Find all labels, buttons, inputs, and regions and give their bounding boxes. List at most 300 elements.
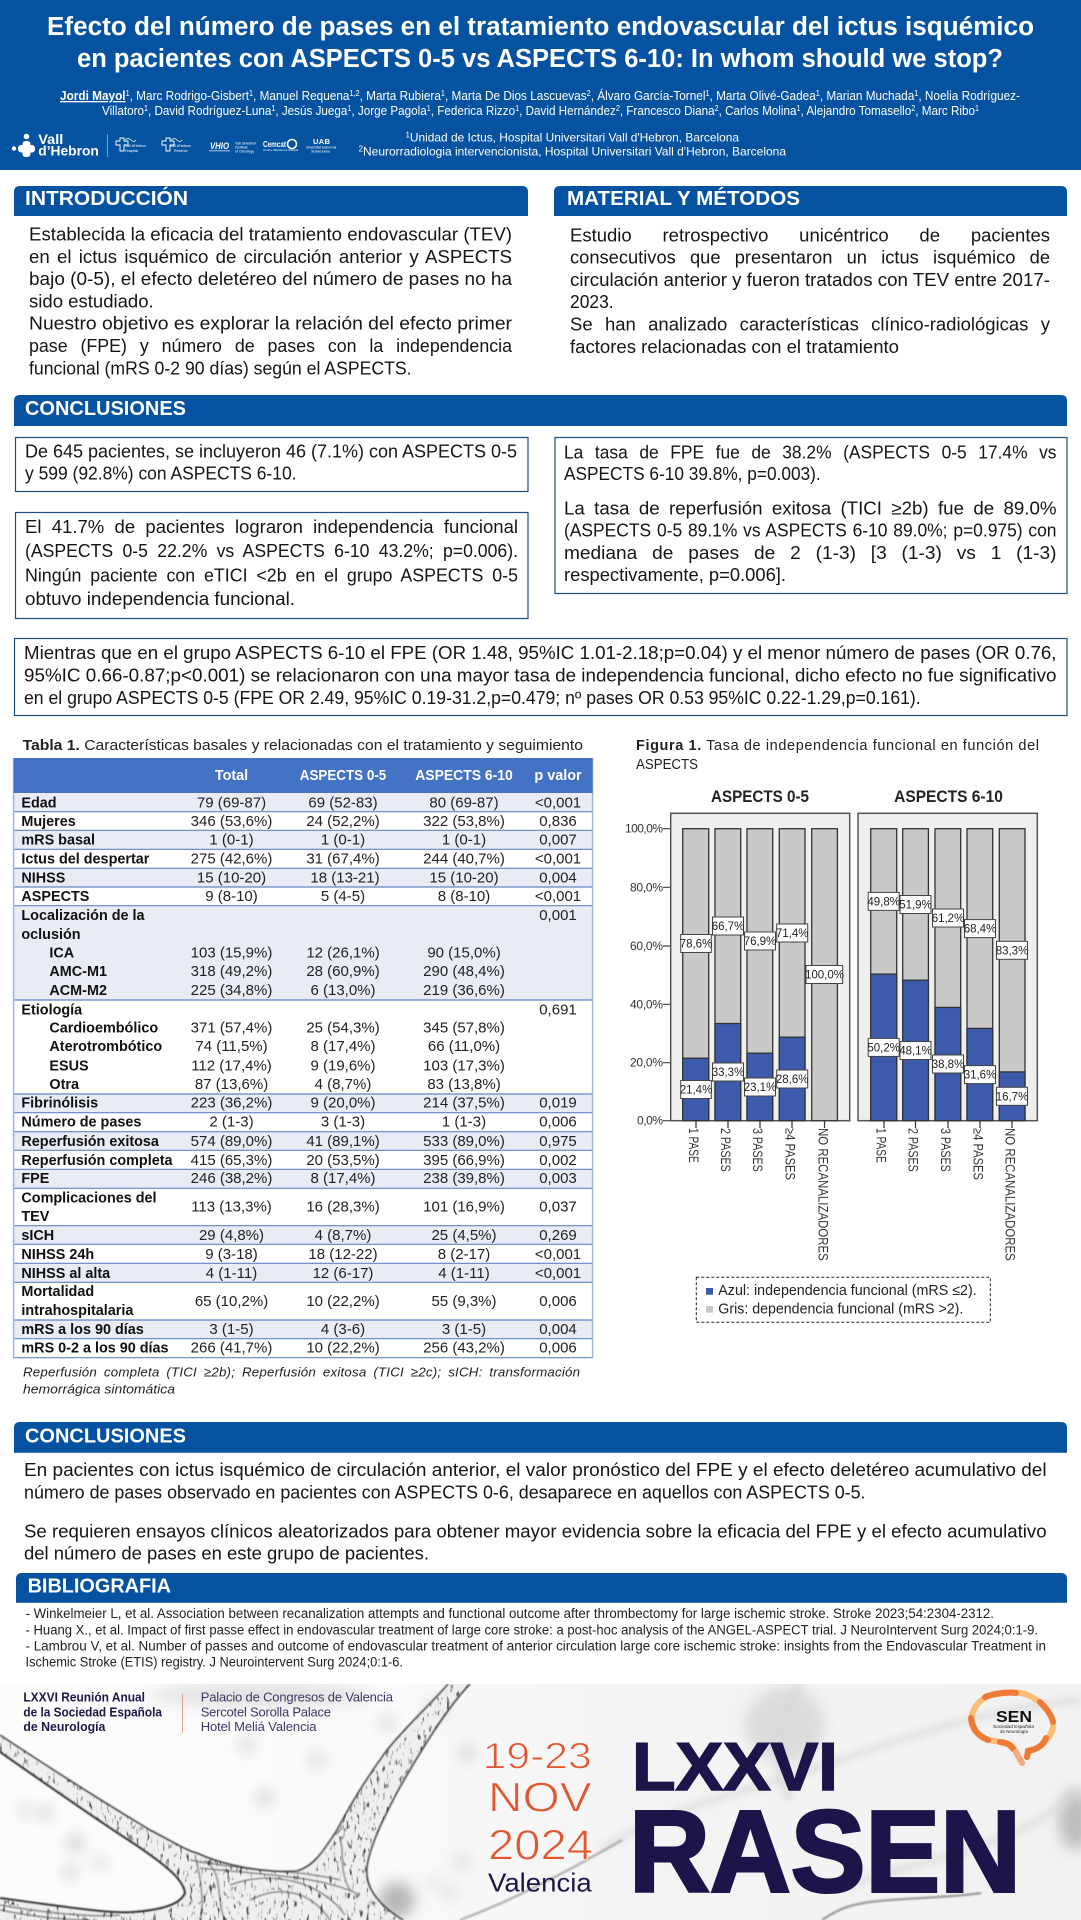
authors: 1,2 xyxy=(349,89,360,98)
row: NIHSS al alta: <0,001 xyxy=(535,1265,581,1282)
row: Mortalidad intrahospitalaria: 65 (10,2%) xyxy=(195,1293,268,1310)
congress title xyxy=(635,1742,1015,1894)
row: mRS 0-2 a los 90 días: 0,006 xyxy=(539,1340,577,1357)
row: Reperfusión completa: 0,002 xyxy=(539,1152,577,1169)
logos: partner institutions: Vall d'Hebron xyxy=(170,144,191,148)
row: Etiología: Cardioembólico xyxy=(49,1021,158,1037)
result box: independencia funcional: Ningún paciente con eTICI <2b en el grupo ASPECTS 0-5 xyxy=(25,566,518,586)
text: material y métodos: Estudio retrospectivo unicéntrico de pacientes xyxy=(570,225,1050,245)
row: Complicaciones del TEV: TEV xyxy=(21,1209,50,1225)
authors: , David Rodríguez-Luna xyxy=(148,103,272,118)
row: Edad: 69 (52-83) xyxy=(308,794,378,811)
result box: pacientes incluidos: De 645 pacientes, se incluyeron 46 (7.1%) con ASPECTS 0-5 xyxy=(25,441,517,461)
bar: 1 pase xyxy=(867,829,900,1121)
bar: no recanalizadores: 83,3% xyxy=(996,945,1028,957)
logo: SEN: SEN xyxy=(996,1709,1032,1726)
logo: Vall d'Hebron: Vall xyxy=(38,131,63,147)
authors: , Noelia Rodríguez- xyxy=(918,88,1020,103)
table: características basales xyxy=(14,758,593,1358)
congress name: LXXVI Reunión Anual xyxy=(23,1690,145,1705)
logos: partner institutions xyxy=(116,137,337,154)
row: Etiología: 83 (13,8%) xyxy=(427,1076,501,1093)
affiliations xyxy=(359,131,786,159)
affiliations: Neurorradiologia intervencionista, Hospital Universitari Vall d'Hebron, Barcelona xyxy=(363,145,786,159)
row: NIHSS al alta: NIHSS al alta xyxy=(21,1266,111,1282)
logo: Vall d'Hebron: d’Hebron xyxy=(38,142,99,158)
row: Ictus del despertar: <0,001 xyxy=(535,850,581,867)
stacked bar chart: independencia funcional xyxy=(625,788,1037,1261)
row: Reperfusión exitosa: Reperfusión exitosa xyxy=(21,1134,160,1150)
row: Número de pases: 3 (1-3) xyxy=(321,1114,365,1131)
row: Reperfusión completa: 395 (66,9%) xyxy=(423,1152,505,1169)
row: NIHSS 24h: 18 (12-22) xyxy=(308,1246,378,1263)
heading: conclusiones: CONCLUSIONES xyxy=(25,397,186,420)
bar: 4 pases: 31,6% xyxy=(964,1070,996,1082)
panel: chart ASPECTS 0-5 xyxy=(671,813,850,1121)
text: introducción: pase (FPE) y número de pases con la independencia xyxy=(29,336,513,356)
authors: , David Hernández xyxy=(519,103,616,118)
logos: partner institutions: Cemcat xyxy=(263,140,286,149)
row: Mujeres: 346 (53,6%) xyxy=(191,813,272,830)
row: FPE: 0,003 xyxy=(539,1170,577,1187)
logos: partner institutions: Vall d'Hebron xyxy=(125,144,146,148)
chart title: ASPECTS 6-10: ASPECTS 6-10 xyxy=(894,788,1003,806)
authors: , Marc Rodrigo-Gisbert xyxy=(130,88,249,103)
row: mRS a los 90 días: 4 (3-6) xyxy=(321,1321,365,1338)
authors: 1 xyxy=(515,104,520,113)
authors: 1 xyxy=(914,89,919,98)
affiliations: 2 xyxy=(359,145,364,154)
congress dates: 2024 xyxy=(488,1821,593,1869)
row: NIHSS xyxy=(21,869,577,886)
row: Ictus del despertar: 244 (40,7%) xyxy=(423,850,505,867)
row: Número de pases: 2 (1-3) xyxy=(209,1114,254,1131)
row: Edad: 80 (69-87) xyxy=(429,794,499,811)
authors: 2 xyxy=(715,104,719,113)
row: Fibrinólisis: 214 (37,5%) xyxy=(423,1095,505,1112)
row: mRS 0-2 a los 90 días: 256 (43,2%) xyxy=(423,1340,505,1357)
row: Número de pases: 0,006 xyxy=(539,1114,577,1131)
bar: 4 pases: 68,4% xyxy=(964,924,996,936)
x axis labels: 3 PASES xyxy=(750,1128,765,1172)
row: Etiología: Aterotrombótico xyxy=(49,1039,162,1055)
text: material y métodos: circulación anterior y fueron tratados con TEV entre 2017- xyxy=(570,270,1050,290)
text: material y métodos: Se han analizado características clínico-radiológicas y xyxy=(570,314,1050,334)
authors: 1 xyxy=(705,89,710,98)
bar: 4 pases: 28,6% xyxy=(776,1074,809,1086)
authors: 1 xyxy=(975,104,979,113)
result box: pacientes incluidos: y 599 (92.8%) con ASPECTS 6-10. xyxy=(25,463,296,483)
row: FPE: FPE xyxy=(21,1171,50,1187)
table header row xyxy=(14,758,593,793)
row: mRS 0-2 a los 90 días: 266 (41,7%) xyxy=(191,1340,272,1357)
row: Localización de la oclusión: 28 (60,9%) xyxy=(306,963,380,980)
y axis: 40,0% xyxy=(630,997,663,1011)
row: ASPECTS: 8 (8-10) xyxy=(438,888,490,905)
row: Fibrinólisis: 0,019 xyxy=(539,1095,577,1112)
congress dates: NOV xyxy=(488,1774,592,1821)
row: Fibrinólisis: 9 (20,0%) xyxy=(310,1095,376,1112)
logos: partner institutions: Vall d'Hebron xyxy=(235,142,256,146)
x axis labels: NO RECANALIZADORES xyxy=(815,1128,830,1261)
text: introducción: bajo (0-5), el efecto deletéreo del número de pases no ha xyxy=(29,269,513,289)
authors: 1 xyxy=(126,89,130,98)
panel: chart ASPECTS 6-10 xyxy=(858,813,1037,1121)
text: referencias: - Winkelmeier L, et al. Association between recanalization attempts and functional outcome after thrombectomy for large ischemic stroke. Stroke 2023;54:2304-2312. xyxy=(26,1606,994,1621)
result box: FPE y reperfusión: La tasa de reperfusión exitosa (TICI ≥2b) fue de 89.0% xyxy=(564,498,1056,518)
result box: FPE y reperfusión: (ASPECTS 0-5 89.1% vs ASPECTS 6-10 89.0%; p=0.975) con xyxy=(564,521,1056,541)
authors: 2 xyxy=(587,89,591,98)
bar: 2 pases xyxy=(899,829,932,1121)
logos: partner institutions: VHIO xyxy=(210,141,229,152)
row: Localización de la oclusión: 290 (48,4%) xyxy=(423,963,505,980)
authors: , Francesco Diana xyxy=(620,103,715,118)
bar: 2 pases: 66,7% xyxy=(712,921,744,933)
row: Reperfusión completa: 415 (65,3%) xyxy=(191,1152,272,1169)
bar: 2 pases: 51,9% xyxy=(899,900,932,912)
logo: Vall d'Hebron xyxy=(12,131,108,158)
row: Mortalidad intrahospitalaria: Mortalidad xyxy=(21,1284,94,1300)
table header row: ASPECTS 0-5 xyxy=(300,768,386,784)
row: NIHSS al alta xyxy=(21,1265,581,1282)
authors: 2 xyxy=(616,104,620,113)
row: Complicaciones del TEV: Complicaciones del xyxy=(21,1190,157,1206)
row: Mortalidad intrahospitalaria xyxy=(21,1284,577,1319)
row: NIHSS 24h: NIHSS 24h xyxy=(21,1247,94,1263)
logos: partner institutions: UAB xyxy=(313,137,331,146)
row: Etiología: 112 (17,4%) xyxy=(191,1058,272,1075)
background blurred cells xyxy=(19,1683,1081,1918)
row: Etiología xyxy=(21,1001,577,1093)
result box: FPE y reperfusión: respectivamente, p=0.006]. xyxy=(564,565,786,585)
logo: SEN: Sociedad Española xyxy=(993,1724,1035,1729)
row: Localización de la oclusión: 103 (15,9%) xyxy=(191,944,272,961)
bar: 2 pases: 33,3% xyxy=(712,1067,744,1079)
heading: material y métodos: MATERIAL Y MÉTODOS xyxy=(567,187,800,210)
y axis: 0,0% xyxy=(637,1114,663,1128)
authors: , Marta Rubiera xyxy=(360,88,442,103)
bar: 3 pases xyxy=(932,829,964,1121)
x axis labels: 2 PASES xyxy=(718,1128,733,1172)
text: introducción: en el ictus isquémico de circulación anterior y ASPECTS xyxy=(29,247,512,267)
text: material y métodos: factores relacionadas con el tratamiento xyxy=(570,337,899,357)
row: NIHSS: 0,004 xyxy=(539,869,577,886)
row: ASPECTS: 5 (4-5) xyxy=(321,888,365,905)
row: mRS basal: 0,007 xyxy=(539,831,577,848)
panel: bibliografía xyxy=(16,1573,1067,1669)
authors: 1 xyxy=(347,104,352,113)
row: ASPECTS: ASPECTS xyxy=(21,889,90,905)
row: NIHSS al alta: 4 (1-11) xyxy=(438,1265,490,1282)
result box: independencia funcional: (ASPECTS 0-5 22.2% vs ASPECTS 6-10 43.2%; p=0.006). xyxy=(25,541,518,561)
result box: FPE y reperfusión: ASPECTS 6-10 39.8%, p=0.003). xyxy=(564,464,821,484)
congress venues: Hotel Meliá Valencia xyxy=(201,1719,317,1734)
bar: 1 pase: 78,6% xyxy=(680,938,712,950)
result box: análisis multivariante: Mientras que en el grupo ASPECTS 6-10 el FPE (OR 1.48, 95%IC 1.01-2.18;p=0.04) y el menor número de pases (OR 0.76, xyxy=(24,643,1056,663)
row: Mortalidad intrahospitalaria: 0,006 xyxy=(539,1293,577,1310)
logos: partner institutions: de Barcelona xyxy=(311,150,330,154)
result box: FPE y reperfusión: mediana de pases de 2 (1-3) [3 (1-3) vs 1 (1-3) xyxy=(564,543,1056,563)
bar: 1 pase: 50,2% xyxy=(867,1042,900,1054)
row: Etiología: 371 (57,4%) xyxy=(191,1020,272,1037)
x axis labels: 2 PASES xyxy=(905,1128,920,1172)
y axis: 60,0% xyxy=(630,939,663,953)
text: introducción xyxy=(29,224,513,378)
congress dates: Valencia xyxy=(488,1868,592,1898)
result box: FPE y reperfusión: La tasa de FPE fue de 38.2% (ASPECTS 0-5 17.4% vs xyxy=(564,442,1056,462)
congress venues xyxy=(201,1692,393,1731)
row: Etiología: 74 (11,5%) xyxy=(195,1038,268,1055)
row: NIHSS al alta: 4 (1-11) xyxy=(206,1265,257,1282)
congress venues: Sercotel Sorolla Palace xyxy=(201,1705,331,1720)
row: Fibrinólisis xyxy=(21,1095,577,1112)
row: Etiología: 0,691 xyxy=(539,1001,577,1018)
row: NIHSS al alta: 12 (6-17) xyxy=(313,1265,373,1282)
bar: no recanalizadores xyxy=(996,829,1028,1121)
authors: , Marian Muchada xyxy=(820,88,915,103)
logos: partner institutions: Universitat Autònoma xyxy=(306,146,337,150)
row: sICH: sICH xyxy=(21,1228,54,1244)
table footnote xyxy=(23,1365,580,1396)
row: Edad xyxy=(21,794,581,811)
row: Mortalidad intrahospitalaria: 55 (9,3%) xyxy=(431,1293,497,1310)
row: Mujeres: Mujeres xyxy=(21,814,76,830)
x axis labels: ≥4 PASES xyxy=(970,1128,985,1180)
row: Localización de la oclusión: ICA xyxy=(49,945,75,961)
row: Etiología: 103 (17,3%) xyxy=(423,1058,505,1075)
bar: 1 pase xyxy=(680,829,712,1121)
row: mRS basal: mRS basal xyxy=(21,832,95,848)
row: ASPECTS: <0,001 xyxy=(535,888,581,905)
table footnote: hemorrágica sintomática xyxy=(23,1381,175,1396)
row: ASPECTS: 9 (8-10) xyxy=(205,888,258,905)
row: Ictus del despertar: Ictus del despertar xyxy=(21,851,150,867)
row: Localización de la oclusión: 90 (15,0%) xyxy=(427,944,501,961)
panel: introducción xyxy=(14,186,528,378)
authors: Jordi Mayol xyxy=(60,88,126,103)
bar: 1 pase: 49,8% xyxy=(867,896,900,908)
y axis: 20,0% xyxy=(630,1056,663,1070)
row: Mujeres: 322 (53,8%) xyxy=(423,813,505,830)
authors: , Marta De Dios Lascuevas xyxy=(445,88,587,103)
logos: partner institutions: Recerca xyxy=(174,149,187,153)
authors xyxy=(60,88,1020,118)
row: NIHSS 24h: 8 (2-17) xyxy=(438,1246,490,1263)
row: ASPECTS xyxy=(21,888,581,905)
banner: LXXVI RASEN xyxy=(0,1683,1081,1920)
congress name xyxy=(23,1690,163,1734)
row: Etiología: 345 (57,8%) xyxy=(423,1020,505,1037)
authors: , Federica Rizzo xyxy=(431,103,515,118)
chart legend: Azul: independencia funcional (mRS ≤2). xyxy=(718,1283,977,1299)
heading: conclusiones xyxy=(14,395,1067,426)
row: FPE: 8 (17,4%) xyxy=(310,1170,376,1187)
row: Complicaciones del TEV xyxy=(21,1190,577,1225)
bar: 2 pases xyxy=(712,829,744,1121)
congress dates: 19-23 xyxy=(483,1735,592,1776)
heading: conclusiones xyxy=(14,1422,1067,1453)
x axis labels: NO RECANALIZADORES xyxy=(1003,1128,1018,1261)
row: Localización de la oclusión: 6 (13,0%) xyxy=(310,982,376,999)
bar: 2 pases: 48,1% xyxy=(899,1046,932,1058)
bar: no recanalizadores: 100,0% xyxy=(805,970,844,982)
heading: introducción xyxy=(14,186,528,216)
row: Etiología: 9 (19,6%) xyxy=(310,1058,376,1075)
row: sICH: 4 (8,7%) xyxy=(315,1227,371,1244)
row: NIHSS: NIHSS xyxy=(21,870,66,886)
heading: introducción: INTRODUCCIÓN xyxy=(25,186,188,210)
authors: , Marta Olivé-Gadea xyxy=(710,88,816,103)
x axis labels: 1 PASE xyxy=(686,1128,701,1163)
bar: 3 pases: 23,1% xyxy=(744,1082,776,1094)
authors: , Manuel Requena xyxy=(253,88,350,103)
congress title: LXXVI xyxy=(632,1730,838,1805)
row: Ictus del despertar xyxy=(21,850,581,867)
table header row: p valor xyxy=(534,768,582,784)
title xyxy=(47,13,1034,73)
row: NIHSS: 18 (13-21) xyxy=(310,869,380,886)
row: Etiología: 87 (13,6%) xyxy=(195,1076,268,1093)
result box: análisis multivariante: en el grupo ASPECTS 0-5 (FPE OR 2.49, 95%IC 0.19-31.2,p=0.479; nº pases OR 0.53 95%IC 0.22-1.29,p=0.161). xyxy=(24,688,921,708)
row: Localización de la oclusión: 318 (49,2%) xyxy=(191,963,272,980)
y axis xyxy=(625,822,671,1128)
row: Reperfusión exitosa: 41 (89,1%) xyxy=(306,1133,380,1150)
logo: SEN: de Neurología xyxy=(1000,1729,1029,1734)
text: conclusiones: Se requieren ensayos clínicos aleatorizados para obtener mayor evidencia sobre la eficacia del FPE y el efecto acumulativo xyxy=(24,1521,1047,1541)
authors: , Jorge Pagola xyxy=(351,103,427,118)
authors: , Alejandro Tomasello xyxy=(800,103,911,118)
row: sICH xyxy=(21,1227,577,1244)
row: Número de pases xyxy=(21,1114,577,1131)
row: Localización de la oclusión: 12 (26,1%) xyxy=(306,944,380,961)
neuron illustration xyxy=(0,1684,981,1920)
row: Reperfusión exitosa: 0,975 xyxy=(539,1133,577,1150)
row: sICH: 29 (4,8%) xyxy=(199,1227,264,1244)
row: Mujeres xyxy=(21,813,577,830)
text: referencias: - Lambrou V, et al. Number of passes and outcome of endovascular treatment of anterior circulation large core ischemic stroke: insights from the Endovascular Treatment in xyxy=(26,1638,1046,1653)
row: Etiología: 4 (8,7%) xyxy=(315,1076,371,1093)
bar: 4 pases: 71,4% xyxy=(776,928,809,940)
row: mRS basal: 1 (0-1) xyxy=(442,831,486,848)
bar: 3 pases xyxy=(744,829,776,1121)
authors: 1 xyxy=(816,89,820,98)
row: Complicaciones del TEV: 113 (13,3%) xyxy=(191,1199,272,1216)
row: mRS basal xyxy=(21,831,577,848)
bar: 4 pases xyxy=(776,829,809,1121)
row: Localización de la oclusión: ACM-M2 xyxy=(49,983,107,999)
panel: resultados (heading conclusiones) xyxy=(14,395,1067,716)
bar: no recanalizadores xyxy=(805,829,844,1121)
result box: análisis multivariante: 95%IC 0.66-0.87;p<0.001) se relacionaron con una mayor tasa de independencia funcional, dicho efecto no fue significativo xyxy=(24,666,1056,686)
x axis labels: ≥4 PASES xyxy=(782,1128,798,1180)
text: introducción: funcional (mRS 0-2 90 días) según el ASPECTS. xyxy=(29,358,412,378)
text: introducción: Nuestro objetivo es explorar la relación del efecto primer xyxy=(29,314,512,334)
congress title: RASEN xyxy=(629,1787,1021,1917)
panel: conclusiones xyxy=(14,1422,1067,1563)
authors: 1 xyxy=(427,104,431,113)
authors: 1 xyxy=(441,89,445,98)
congress dates xyxy=(486,1743,592,1892)
row: Etiología: 66 (11,0%) xyxy=(428,1038,500,1055)
row: Mujeres: 24 (52,2%) xyxy=(306,813,380,830)
heading: bibliografía: BIBLIOGRAFIA xyxy=(28,1575,171,1598)
congress venues: Palacio de Congresos de Valencia xyxy=(201,1690,394,1705)
row: Reperfusión exitosa xyxy=(21,1133,577,1150)
row: Mortalidad intrahospitalaria: 10 (22,2%) xyxy=(306,1293,380,1310)
row: Fibrinólisis: 223 (36,2%) xyxy=(191,1095,272,1112)
y axis: 80,0% xyxy=(630,880,663,894)
x axis labels xyxy=(686,1121,1018,1261)
chart legend xyxy=(696,1277,990,1322)
bar: no recanalizadores: 16,7% xyxy=(996,1091,1028,1103)
row: Reperfusión completa: 20 (53,5%) xyxy=(306,1152,380,1169)
chart title: ASPECTS 0-5: ASPECTS 0-5 xyxy=(711,788,809,806)
affiliations: Unidad de Ictus, Hospital Universitari Vall d'Hebron, Barcelona xyxy=(410,131,739,145)
header banner xyxy=(0,0,1081,170)
authors: 1 xyxy=(249,89,254,98)
row: mRS 0-2 a los 90 días xyxy=(21,1340,577,1357)
row: mRS a los 90 días xyxy=(21,1321,577,1338)
row: Edad: Edad xyxy=(21,795,57,811)
row: FPE: 246 (38,2%) xyxy=(191,1170,272,1187)
authors: 1 xyxy=(271,104,276,113)
table footnote: Reperfusión completa (TICI ≥2b); Reperfusión exitosa (TICI ≥2c); sICH: transformación xyxy=(23,1365,580,1380)
row: NIHSS 24h: <0,001 xyxy=(535,1246,581,1263)
text: referencias: Ischemic Stroke (ETIS) registry. J Neurointervent Surg 2024;0:1-6. xyxy=(26,1654,403,1669)
authors: 1 xyxy=(796,104,801,113)
table header row: Total xyxy=(215,768,248,784)
authors: 1 xyxy=(144,104,148,113)
row: mRS a los 90 días: 0,004 xyxy=(539,1321,577,1338)
row: Número de pases: 1 (1-3) xyxy=(442,1114,486,1131)
result box: independencia funcional xyxy=(16,512,528,618)
chart legend: Gris: dependencia funcional (mRS >2). xyxy=(718,1301,963,1317)
result box: independencia funcional: El 41.7% de pacientes lograron independencia funcional xyxy=(25,517,518,537)
logos: partner institutions: of Oncology xyxy=(235,150,254,154)
text: conclusiones xyxy=(24,1460,1047,1563)
heading: conclusiones: CONCLUSIONES xyxy=(25,1425,186,1448)
row: Reperfusión exitosa: 533 (89,0%) xyxy=(423,1133,505,1150)
row: NIHSS 24h xyxy=(21,1246,581,1263)
text: introducción: sido estudiado. xyxy=(29,291,154,311)
row: sICH: 0,269 xyxy=(539,1227,577,1244)
row: mRS a los 90 días: 3 (1-5) xyxy=(442,1321,486,1338)
title: en pacientes con ASPECTS 0-5 vs ASPECTS 6-10: In whom should we stop? xyxy=(77,45,1003,73)
text: material y métodos: consecutivos que presentaron un ictus isquémico de xyxy=(570,248,1050,268)
bar: 3 pases: 38,8% xyxy=(932,1059,964,1071)
affiliations: 1 xyxy=(406,131,410,140)
row: mRS basal: 1 (0-1) xyxy=(321,831,365,848)
row: mRS a los 90 días: mRS a los 90 días xyxy=(21,1322,144,1338)
logos: partner institutions: Institute xyxy=(235,146,248,150)
result box: independencia funcional: obtuvo independencia funcional. xyxy=(25,589,295,609)
row: Localización de la oclusión: 219 (36,6%) xyxy=(423,982,505,999)
figure caption xyxy=(636,738,1039,773)
bar: 3 pases: 61,2% xyxy=(932,913,964,925)
row: sICH: 25 (4,5%) xyxy=(431,1227,497,1244)
bar: 4 pases xyxy=(964,829,996,1121)
text: material y métodos: 2023. xyxy=(570,292,614,312)
panel: material y métodos xyxy=(554,186,1067,357)
row: Localización de la oclusión: oclusión xyxy=(21,927,81,943)
row: Localización de la oclusión: 225 (34,8%) xyxy=(191,982,272,999)
row: Número de pases: Número de pases xyxy=(21,1115,141,1131)
row: Reperfusión completa xyxy=(21,1152,577,1169)
y axis: 100,0% xyxy=(625,822,663,836)
row: Complicaciones del TEV: 101 (16,9%) xyxy=(423,1199,505,1216)
logos: partner institutions: Hospital xyxy=(125,149,138,153)
text: conclusiones: En pacientes con ictus isquémico de circulación anterior, el valor pronóstico del FPE y el efecto deletéreo acumulativo del xyxy=(24,1460,1047,1480)
